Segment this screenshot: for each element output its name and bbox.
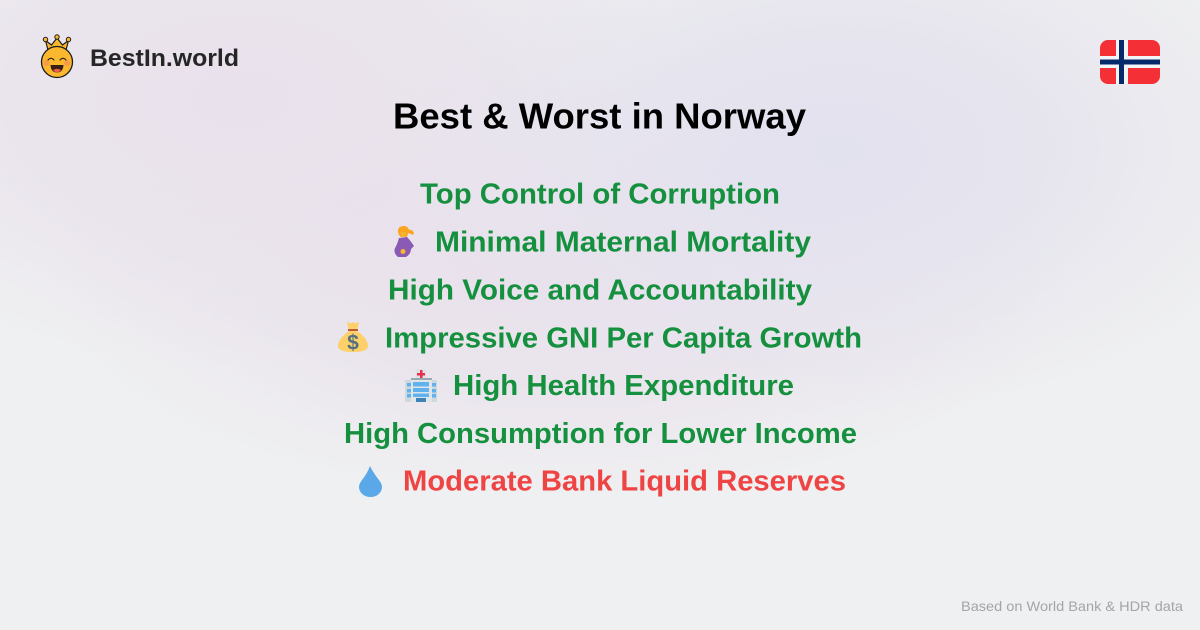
icon: hospital: [405, 369, 437, 402]
icon: crowned smiling face: [42, 35, 72, 78]
icon: money bag: $: [347, 332, 359, 354]
row: High Health Expenditure: [405, 369, 794, 402]
icon: pregnant woman: [394, 226, 414, 257]
label: Moderate Bank Liquid Reserves: [403, 466, 846, 498]
label: Minimal Maternal Mortality: [435, 226, 811, 258]
list of rankings: [338, 178, 862, 498]
row: High Voice and Accountability: High Voice and Accountability: [388, 274, 812, 306]
label: Impressive GNI Per Capita Growth: [385, 322, 862, 354]
row: Moderate Bank Liquid Reserves: [359, 466, 846, 498]
title: Best & Worst in Norway: [393, 96, 806, 136]
row: Top Control of Corruption: Top Control of Corruption: [420, 178, 780, 210]
row: Minimal Maternal Mortality: [394, 226, 811, 258]
icon: water drop: [359, 466, 382, 497]
row: High Consumption for Lower Income: High Consumption for Lower Income: [344, 418, 857, 450]
logo wordmark: BestIn.world: [90, 45, 239, 72]
row: Impressive GNI Per Capita Growth: [338, 322, 862, 354]
logo: BestIn.world: [42, 35, 239, 78]
source note: Based on World Bank & HDR data: [961, 598, 1183, 614]
icon: money bag: [338, 322, 368, 354]
icon: Norway flag: [1100, 40, 1160, 84]
label: High Health Expenditure: [453, 370, 794, 402]
